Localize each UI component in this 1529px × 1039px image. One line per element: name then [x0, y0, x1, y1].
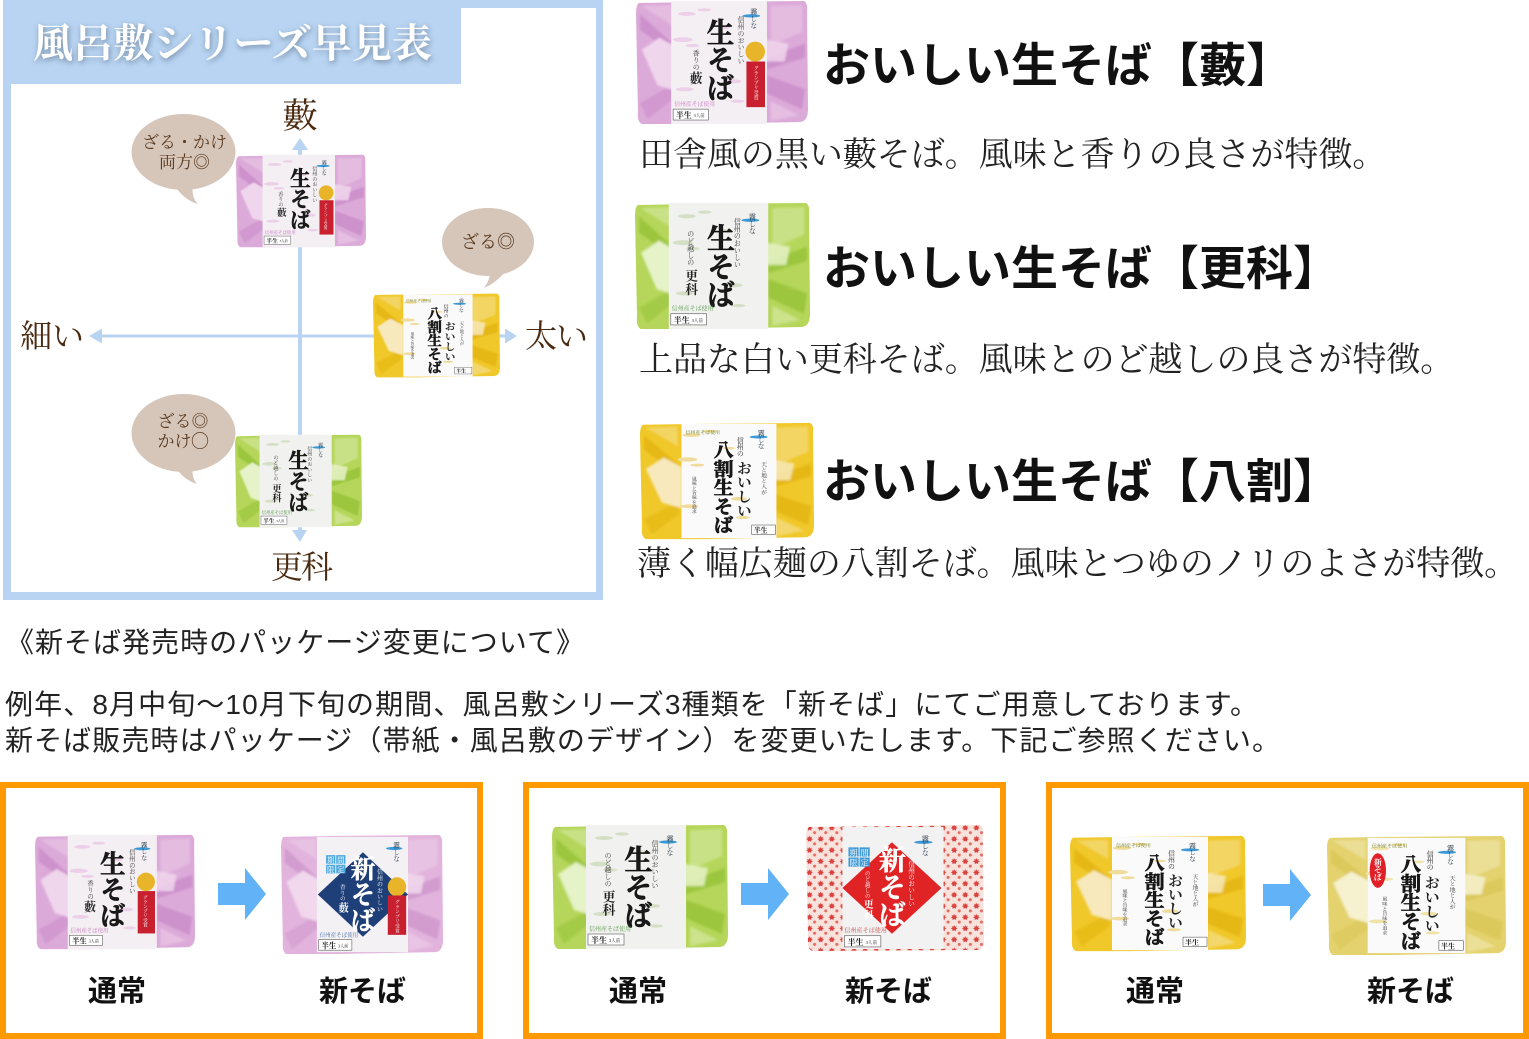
notice text block: 例年、8月中旬～10月下旬の期間、風呂敷シリーズ3種類を「新そば」にてご用意しております。	[5, 689, 1258, 720]
package: sarashina: 3人前	[692, 317, 703, 324]
package: sarashina normal: のど越しの	[604, 852, 612, 887]
product: yabu package in chart	[236, 154, 366, 248]
package: yabu: 香りの	[691, 49, 700, 71]
speech bubble: top left	[132, 114, 236, 204]
package: yabu new soba: グランプリ受賞	[395, 898, 400, 934]
product row: sarashina	[635, 203, 1454, 379]
panel: furoshiki series quick chart	[3, 0, 603, 600]
package: yabu new soba: 藪	[336, 901, 348, 914]
arrow	[1263, 869, 1311, 921]
product: hachiwari package in chart: 信州産そば使用	[406, 298, 432, 303]
product: yabu package in chart: 3人前	[280, 238, 289, 243]
product: hachiwari package in chart: おいしい	[442, 321, 455, 362]
product: hachiwari package in chart: 天と地と人が	[459, 320, 465, 347]
product row: hachiwari	[637, 423, 1518, 583]
arrow	[218, 868, 266, 920]
package: sarashina new soba: 更科	[861, 898, 873, 920]
product: sarashina package in chart	[235, 434, 362, 528]
heading: sarashina: おいしい生そば【更科】	[823, 242, 1340, 295]
package: sarashina: 生そば	[703, 223, 735, 309]
package: hachiwari new soba: 信州産そば使用	[1372, 843, 1407, 849]
speech bubble: top left: 両方◎	[159, 153, 210, 172]
package: sarashina: 半生	[674, 315, 690, 325]
package: yabu normal: 3人前	[89, 938, 99, 944]
product: sarashina package in chart: 信州産そば使用	[262, 509, 292, 516]
package: sarashina new soba: 霧しな	[921, 834, 929, 857]
horizontal axis arrow	[89, 328, 517, 344]
package: hachiwari normal: 信州の	[1166, 849, 1175, 870]
package: yabu: 生そば	[703, 18, 734, 101]
speech bubble: right: ざる◎	[461, 232, 515, 252]
package: sarashina new soba: 限	[849, 859, 858, 868]
package: sarashina new soba: 新そば	[875, 845, 906, 928]
package: yabu: 霧しな	[749, 7, 757, 29]
label: new soba: 新そば	[319, 975, 406, 1008]
product: sarashina package in chart: 生そば	[285, 450, 309, 512]
package: hachiwari normal: 霧しな	[1187, 841, 1196, 862]
axis label: right: 太い	[525, 318, 588, 354]
package: sarashina normal: 更科	[600, 889, 616, 917]
panel: sarashina comparison	[526, 785, 1003, 1036]
package: sarashina new soba: 信州産そば使用	[844, 927, 887, 935]
package: sarashina new soba: 半生	[847, 937, 864, 947]
product: yabu package in chart: 信州産そば使用	[265, 229, 296, 236]
speech bubble: bottom left: ざる◎	[158, 412, 208, 431]
description: yabu: 田舎風の黒い藪そば。風味と香りの良さが特徴。	[639, 136, 1386, 174]
product: sarashina package in chart: 3人前	[276, 518, 285, 523]
package: yabu: グランプリ受賞	[752, 65, 758, 102]
package: yabu new soba: 半生	[322, 940, 337, 950]
product: yabu package in chart: 藪	[275, 207, 287, 218]
package: yabu: 信州のおいしい	[736, 15, 744, 65]
axis label: top: 藪	[282, 97, 318, 136]
package: sarashina normal: 信州のおいしい	[651, 839, 659, 889]
package: sarashina normal: 3人前	[609, 937, 621, 944]
label: normal: 通常	[1126, 975, 1184, 1008]
package: sarashina new soba: 3人前	[866, 939, 877, 946]
package: hachiwari normal: 天と地と人が	[1191, 874, 1198, 908]
package: hachiwari new soba: 八割生そば	[1397, 854, 1422, 950]
package: hachiwari new soba: おいしい	[1423, 875, 1439, 933]
package: hachiwari: 天と地と人が	[760, 461, 767, 495]
panel: yabu comparison	[3, 785, 480, 1036]
package: sarashina new soba: 期	[849, 847, 858, 857]
package: sarashina	[635, 203, 810, 329]
panel: hachiwari comparison	[1049, 785, 1526, 1036]
speech bubble: bottom left: かけ◯	[158, 432, 208, 451]
product: sarashina package in chart: 更科	[270, 483, 282, 504]
package: sarashina normal: 生そば	[620, 845, 652, 929]
package: hachiwari normal: 風味と旨味を追求	[1121, 888, 1127, 927]
package: hachiwari: 八割生そば	[710, 441, 735, 534]
package: yabu new soba: 定	[337, 864, 345, 874]
package: sarashina: 霧しな	[748, 212, 756, 235]
package: hachiwari normal: 八割生そば	[1141, 854, 1166, 946]
product: yabu package in chart: グランプリ受賞	[323, 202, 328, 230]
product: hachiwari package in chart: 霧しな	[458, 298, 463, 313]
product: yabu package in chart: 信州のおいしい	[311, 164, 317, 203]
package: sarashina normal	[552, 825, 728, 949]
package: hachiwari normal: おいしい	[1166, 874, 1182, 930]
package: hachiwari: 信州産そば使用	[685, 429, 720, 436]
package: yabu new soba: 香りの	[339, 883, 345, 902]
package: hachiwari new soba: 信州の	[1425, 849, 1434, 871]
package: yabu: 信州産そば使用	[674, 100, 715, 108]
package: hachiwari new soba: 天と地と人が	[1448, 875, 1455, 910]
package: yabu: 藪	[688, 71, 702, 86]
axis label: left: 細い	[20, 318, 84, 354]
package: hachiwari: 半生	[754, 526, 768, 534]
package: sarashina normal: 信州産そば使用	[589, 925, 631, 933]
package: sarashina new soba	[806, 825, 984, 951]
product: yabu package in chart: 霧しな	[321, 159, 327, 176]
product: yabu package in chart: 生そば	[287, 167, 311, 230]
package: hachiwari new soba: 半生	[1441, 942, 1455, 950]
label: new soba: 新そば	[1367, 975, 1454, 1008]
package: hachiwari: 信州の	[735, 436, 744, 457]
package: hachiwari	[640, 422, 814, 540]
chart title: 風呂敷シリーズ早見表	[33, 21, 432, 66]
package: hachiwari normal	[1070, 836, 1246, 952]
description: hachiwari: 薄く幅広麺の八割そば。風味とつゆのノリのよさが特徴。	[637, 545, 1518, 583]
product: yabu package in chart: 半生	[266, 237, 278, 245]
package: yabu new soba: 間	[337, 856, 345, 865]
product: sarashina package in chart: 霧しな	[317, 441, 323, 458]
package: sarashina: 信州産そば使用	[672, 305, 713, 313]
package: sarashina: 信州のおいしい	[733, 217, 741, 268]
label: new soba: 新そば	[845, 975, 932, 1008]
heading: yabu: おいしい生そば【藪】	[823, 39, 1293, 92]
package: sarashina: 更科	[683, 269, 698, 297]
package: hachiwari normal: 半生	[1185, 938, 1199, 946]
package: yabu new soba: 信州産そば使用	[320, 931, 359, 939]
product: hachiwari package in chart: 風味と旨味を追求	[410, 331, 414, 360]
package: hachiwari normal: 信州産そば使用	[1116, 842, 1151, 849]
package: yabu normal: 半生	[72, 937, 87, 946]
product: hachiwari package in chart	[373, 294, 500, 378]
package: sarashina normal: 半生	[591, 935, 607, 945]
notice text block	[5, 689, 1280, 756]
description: sarashina: 上品な白い更科そば。風味とのど越しの良さが特徴。	[639, 341, 1454, 379]
package: yabu new soba: 限	[327, 865, 335, 874]
vertical axis arrow	[292, 138, 308, 542]
product: sarashina package in chart: 半生	[263, 517, 275, 525]
product: hachiwari package in chart: 信州の	[443, 303, 448, 318]
package: yabu normal: 霧しな	[140, 840, 147, 861]
product: hachiwari package in chart: 八割生そば	[424, 306, 443, 374]
package: yabu normal: グランプリ受賞	[143, 894, 148, 928]
product: sarashina package in chart: のど越しの	[272, 454, 278, 481]
package: sarashina: のど越しの	[687, 230, 695, 266]
package: yabu new soba: 信州のおいしい	[376, 868, 383, 913]
product: hachiwari package in chart: 半生	[456, 368, 466, 375]
package: yabu new soba	[281, 835, 443, 954]
package: yabu normal: 信州のおいしい	[128, 847, 135, 894]
section heading: package change notice: 《新そば発売時のパッケージ変更について》	[6, 627, 584, 658]
package: sarashina new soba: のど越しの	[864, 871, 870, 899]
package: sarashina normal: 霧しな	[666, 834, 674, 856]
package: hachiwari new soba: 新そば	[1373, 857, 1382, 881]
package: yabu normal: 信州産そば使用	[70, 926, 109, 935]
package: hachiwari new soba: 霧しな	[1445, 844, 1454, 865]
package: yabu normal: 香りの	[86, 879, 93, 900]
package: hachiwari new soba	[1327, 836, 1506, 955]
package: yabu new soba: 3人前	[338, 942, 349, 949]
product row: yabu	[636, 1, 1386, 174]
package: hachiwari new soba: 風味と旨味を追求	[1381, 896, 1387, 936]
package: yabu	[636, 1, 808, 124]
heading: hachiwari: おいしい生そば【八割】	[823, 455, 1340, 508]
package: yabu new soba: 新そば	[347, 855, 375, 933]
package: yabu: 半生	[676, 110, 692, 120]
label: normal: 通常	[88, 975, 146, 1008]
product: sarashina package in chart: 信州のおいしい	[306, 444, 312, 483]
speech bubble: right	[442, 208, 534, 288]
package: sarashina new soba: 信州のおいしい	[907, 859, 915, 907]
package: yabu normal	[35, 834, 195, 950]
product: yabu package in chart: 香りの	[277, 190, 283, 207]
package: yabu new soba: 霧しな	[392, 840, 400, 862]
speech bubble: top left: ざる・かけ	[142, 133, 227, 152]
arrow	[741, 868, 789, 920]
package: hachiwari: 霧しな	[756, 428, 765, 449]
package: yabu normal: 藪	[83, 900, 97, 913]
axis label: bottom: 更科	[271, 549, 333, 585]
label: normal: 通常	[609, 975, 667, 1008]
package: hachiwari: おいしい	[735, 461, 751, 518]
package: sarashina new soba: 間	[861, 848, 869, 857]
package: yabu new soba: 期	[327, 855, 335, 865]
package: yabu: 3人前	[694, 112, 705, 119]
package: sarashina new soba: 定	[861, 858, 869, 868]
notice text block: 新そば販売時はパッケージ（帯紙・風呂敷のデザイン）を変更いたします。下記ご参照ください。	[5, 725, 1280, 756]
package: hachiwari: 風味と旨味を追求	[691, 476, 696, 515]
package: yabu normal: 生そば	[97, 850, 126, 928]
speech bubble: bottom left	[132, 394, 236, 484]
